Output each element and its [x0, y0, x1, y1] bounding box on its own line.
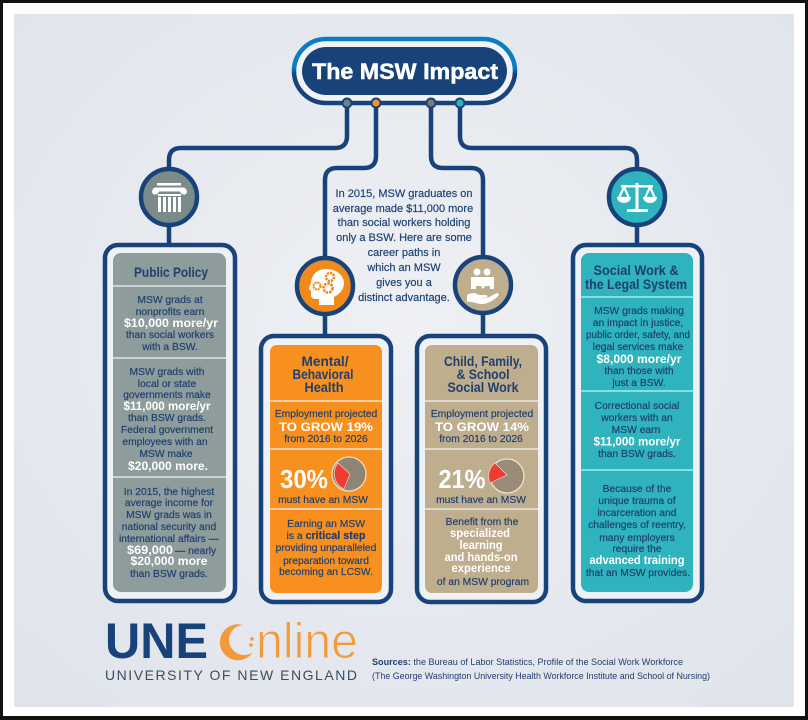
icon: scales — [609, 169, 665, 225]
text block: government: Federal government — [121, 425, 213, 436]
sources: Sources: the Bureau of Labor Statistics, Profile of the Social Work Workforce — [372, 657, 683, 667]
text block: government: employees with an — [122, 437, 208, 448]
text block: government: local or state — [138, 379, 196, 390]
text block: critical step — [276, 519, 377, 578]
panel: public policy — [105, 245, 235, 601]
intro text: average made $11,000 more — [333, 203, 473, 215]
text block: justice: legal services make — [593, 342, 683, 353]
text block: critical step: providing unparalleled — [276, 543, 377, 554]
text block: justice — [586, 306, 690, 389]
icon: family in hand — [455, 257, 511, 313]
heading: mental/behavioral health: Behavioral — [292, 366, 354, 382]
panel: mental/behavioral health — [261, 336, 391, 602]
intro text: only a BSW. Here are some — [336, 232, 472, 244]
text block: highest income: international affairs — — [119, 534, 220, 545]
text block: critical step: preparation toward — [283, 556, 369, 567]
logo: UNE Online: UNIVERSITY OF NEW ENGLAND — [105, 667, 357, 683]
panel: child, family and school social work — [417, 336, 546, 602]
heading: child, family and school social work: & School — [456, 366, 510, 382]
heading: child, family and school social work: Child, Family, — [444, 353, 522, 369]
intro text: distinct advantage. — [358, 292, 450, 304]
text block: correctional: MSW earn — [612, 425, 661, 436]
text block: highest income: than BSW grads. — [130, 569, 208, 580]
text block: specialized learning: of an MSW program — [437, 577, 529, 588]
intro text: than social workers holding — [338, 217, 470, 229]
text block: justice: public order, safety, and — [586, 330, 690, 341]
text block: justice: $8,000 more/yr — [596, 354, 682, 366]
text block: nonprofits: MSW grads at — [137, 295, 203, 306]
text block: critical step: is a critical step — [287, 530, 366, 542]
text block: highest income: national security and — [122, 522, 216, 533]
text block: government: MSW make — [139, 449, 193, 460]
text block: correctional: $11,000 more/yr — [594, 436, 681, 448]
text block: specialized learning — [437, 517, 529, 588]
text block: justice: MSW grads making — [594, 306, 684, 317]
text block: highest income: In 2015, the highest — [124, 487, 214, 498]
text block: government: than BSW grads. — [128, 413, 206, 424]
text block: critical step: becoming an LCSW. — [279, 567, 373, 578]
text block: advanced training: incarceration and — [598, 508, 677, 519]
text block: nonprofits: than social workers — [126, 330, 214, 341]
text block: growth: from 2016 to 2026 — [284, 434, 368, 445]
title — [294, 39, 515, 103]
text block: government: $11,000 more/yr — [124, 401, 211, 413]
pie chart: 30% — [332, 457, 366, 491]
text block: nonprofits: $10,000 more/yr — [124, 318, 219, 330]
intro text — [333, 188, 473, 304]
text block: growth: TO GROW 14% — [435, 422, 529, 434]
icon: head with gears — [297, 258, 353, 314]
caption: must have an MSW: must have an MSW — [278, 495, 368, 506]
heading: social work and the legal system: Social Work & — [594, 262, 678, 278]
heading: child, family and school social work: Social Work — [448, 379, 519, 395]
text block: advanced training: that an MSW provides. — [586, 568, 690, 579]
text block: growth — [431, 409, 533, 445]
text block: highest income: MSW grads was in — [126, 510, 212, 521]
connector dots — [342, 98, 464, 108]
panel: social work and the legal system — [573, 245, 702, 601]
text block: growth: Employment projected — [275, 409, 377, 420]
heading: public policy: Public Policy — [134, 264, 208, 280]
text block: growth: from 2016 to 2026 — [439, 434, 523, 445]
heading: social work and the legal system: the Legal System — [585, 276, 687, 292]
intro text: In 2015, MSW graduates on — [336, 188, 472, 200]
logo: UNE Online: UNE — [105, 613, 208, 669]
heading: social work and the legal system — [585, 262, 687, 292]
icon: column — [141, 169, 197, 225]
sources: (The George Washington University Health Workforce Institute and School of Nursing) — [372, 671, 710, 681]
caption: must have an MSW: must have an MSW — [436, 495, 526, 506]
text block: advanced training — [586, 484, 690, 579]
sources — [372, 657, 710, 681]
text block: advanced training: advanced training — [590, 555, 684, 567]
text block: correctional — [594, 401, 681, 460]
text block: specialized learning: specialized — [450, 528, 510, 540]
heading: mental/behavioral health: Mental/ — [302, 353, 349, 369]
text block: highest income: $20,000 more — [130, 556, 208, 568]
text block: government: governments make — [123, 390, 211, 401]
text block: justice: than those with — [604, 366, 674, 377]
text block: advanced training: many employers — [599, 533, 675, 544]
connector lines — [169, 103, 637, 336]
text block: highest income: — nearly — [175, 546, 217, 557]
heading: child, family and school social work — [444, 353, 522, 395]
text block: highest income: $69,000 — [127, 545, 173, 557]
text block: critical step: Earning an MSW — [287, 519, 365, 530]
title: The MSW Impact — [312, 59, 499, 84]
text block: nonprofits: with a BSW. — [141, 342, 198, 353]
pie chart: 21% — [489, 459, 524, 493]
text block: highest income: average income for — [125, 498, 214, 509]
intro text: which an MSW — [366, 262, 441, 274]
text block: justice: an impact in justice, — [593, 318, 683, 329]
stat: 30%: 30% — [280, 464, 328, 494]
text block: advanced training: unique trauma of — [598, 496, 676, 507]
text block: correctional: than BSW grads. — [598, 449, 676, 460]
text block: growth: Employment projected — [431, 409, 533, 420]
text block: government: MSW grads with — [130, 367, 205, 378]
text block: government — [121, 367, 213, 473]
intro text: gives you a — [376, 277, 433, 289]
text block: specialized learning: experience — [452, 563, 510, 575]
text block: specialized learning: and hands-on — [444, 552, 518, 564]
text block: growth: TO GROW 19% — [279, 422, 373, 434]
text block: government: $20,000 more. — [128, 461, 208, 473]
text block: nonprofits — [124, 295, 219, 353]
heading: mental/behavioral health: Health — [304, 379, 344, 395]
text block: advanced training: challenges of reentry, — [588, 520, 686, 531]
text block: specialized learning: Benefit from the — [446, 517, 519, 528]
text block: highest income — [119, 487, 220, 580]
text block: growth — [275, 409, 377, 445]
stat: 21%: 21% — [438, 464, 486, 494]
text block: correctional: Correctional social — [595, 401, 679, 412]
logo: UNE Online: nline — [256, 613, 358, 669]
text block: correctional: workers with an — [600, 413, 673, 424]
heading: mental/behavioral health — [292, 353, 354, 395]
intro text: career paths in — [368, 247, 440, 259]
text block: nonprofits: nonprofits earn — [136, 307, 205, 318]
text block: specialized learning: learning — [460, 540, 502, 552]
text block: advanced training: require the — [612, 544, 662, 555]
text block: advanced training: Because of the — [603, 484, 672, 495]
logo: UNE Online — [105, 613, 358, 683]
text block: justice: just a BSW. — [611, 378, 666, 389]
